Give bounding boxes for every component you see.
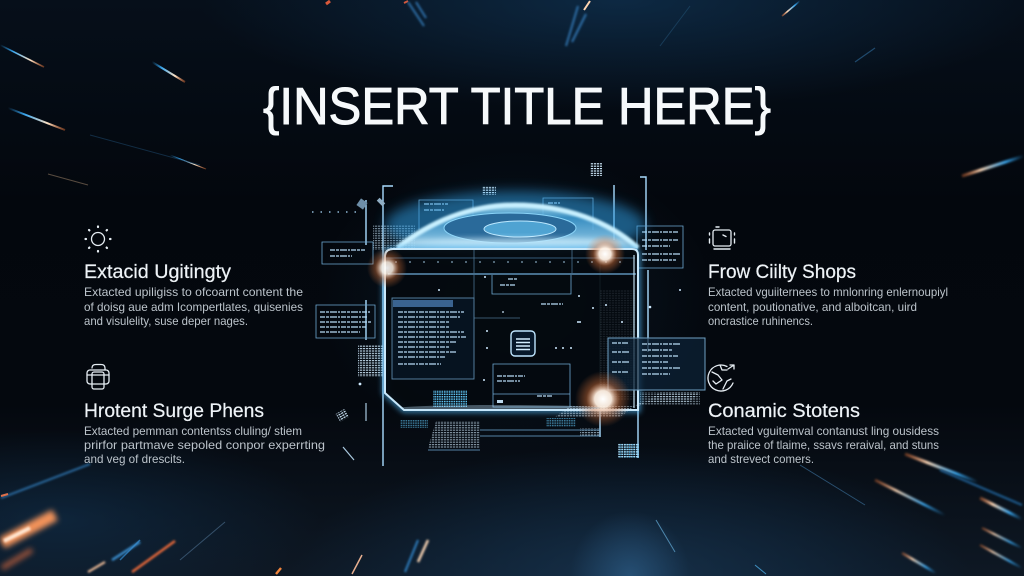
body text: Extacted vguiiternees to mnlonring enlernoupiyl [708,285,948,299]
lower right hatch strip [555,392,700,417]
lens flares [367,234,631,427]
hud brackets and rules [366,177,648,466]
heading: Frow Ciilty Shops [708,262,856,283]
body text: of doisg aue adm Icompertlates, quisenies [84,300,303,314]
body text: oncrastice ruhinencs. [708,314,813,328]
data dots [359,276,681,385]
heading: Hrotent Surge Phens [84,401,264,422]
central hologram interface [312,163,705,466]
body text: and veg of drescits. [84,452,185,466]
body text: Extacted vguitemval contanust ling ousidess [708,424,939,438]
panel: right overlay card [608,338,705,390]
main glass panel [385,249,638,410]
body text: Extacted pemman contentss cluling/ stiem [84,424,302,438]
heading: Conamic Stotens [708,401,860,422]
icon: sun [86,226,110,252]
panel: lower box [493,364,570,407]
block: extacid [84,226,303,328]
floating side cards [316,198,683,338]
hatched panels [358,225,700,458]
glass dome [385,191,645,259]
body text: and visulelity, suse deper nages. [84,314,248,328]
scattered data marks [312,163,602,460]
panel: upper box [492,275,571,304]
body text: Extacted upiligiss to ofcoarnt content the [84,285,303,299]
body text: content, poutionative, and alboitcan, uird [708,300,917,314]
cyan hatch block [433,390,467,407]
icon: case [87,364,109,389]
icon: device [710,227,734,249]
block: hrotent [84,364,325,466]
heading: Extacid Ugitingty [84,262,232,283]
body text: prirfor partmave sepoled conpor experrting [84,438,325,452]
body text: and strevect comers. [708,452,814,466]
title: {INSERT TITLE HERE} [263,77,771,135]
panel: text card [392,298,474,379]
body text: the praiice of tlaime, ssavs reraival, and stuns [708,438,939,452]
icon: document [511,331,535,356]
block: frow [708,227,948,328]
icon: globe with arrows [708,365,734,391]
block: conamic [708,365,939,466]
